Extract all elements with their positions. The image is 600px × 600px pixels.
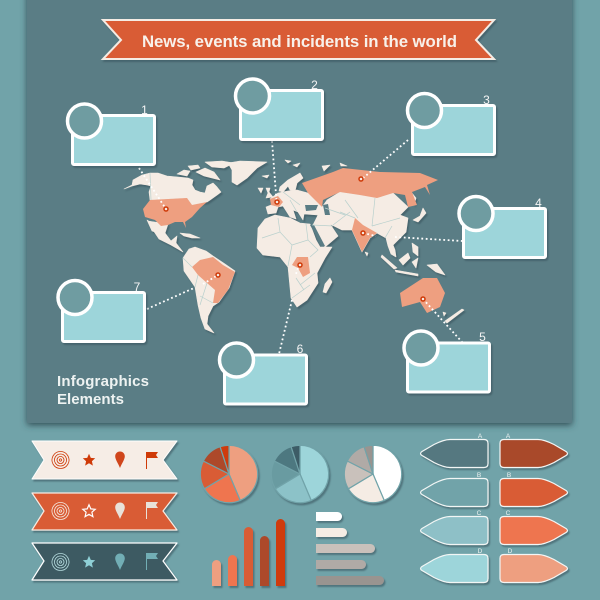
callout 4 — [459, 196, 546, 258]
caption: Infographics Elements: Elements — [57, 391, 124, 408]
pie chart: orange — [200, 445, 258, 503]
arrow letters: A — [506, 433, 511, 440]
arrow letters: C — [506, 510, 511, 517]
callout 1: 1 — [141, 103, 148, 117]
arrow labels: left set — [420, 440, 488, 582]
callout 7: 7 — [134, 280, 141, 294]
arrow letters: D — [508, 548, 513, 555]
arrow letters — [477, 433, 513, 555]
country borders — [150, 173, 400, 305]
callout 3: 3 — [483, 93, 490, 107]
arrow letters: A — [478, 433, 483, 440]
callout 1 — [68, 103, 154, 164]
callout 6: 6 — [297, 342, 304, 356]
arrow letters: B — [507, 472, 511, 479]
callout 5: 5 — [479, 330, 486, 344]
callout 7 — [58, 280, 144, 342]
location pins — [164, 177, 425, 301]
land masses — [124, 160, 464, 333]
arrow labels: right set — [500, 440, 568, 582]
title banner — [103, 20, 494, 59]
callout 5 — [404, 330, 490, 392]
pie chart: neutral — [344, 445, 402, 503]
ribbon: orange icons — [32, 493, 177, 530]
title banner: News, events and incidents in the world — [142, 32, 457, 51]
callout 2 — [236, 78, 322, 140]
callout 2: 2 — [311, 78, 318, 92]
callout 6 — [220, 342, 306, 404]
highlighted countries — [143, 168, 445, 313]
ribbon: dark icons — [32, 543, 177, 580]
arrow letters: B — [477, 472, 481, 479]
bar chart: horizontal — [316, 512, 384, 585]
world map — [124, 160, 464, 333]
arrow letters: D — [478, 548, 483, 555]
callout 4: 4 — [535, 196, 542, 210]
bar chart: vertical — [212, 519, 285, 586]
callout 3 — [408, 93, 494, 154]
caption: Infographics Elements: Infographics — [57, 373, 149, 390]
connector lines — [139, 140, 462, 354]
pie chart: teal — [271, 445, 329, 503]
inland seas — [197, 185, 330, 246]
ribbon: cream icons — [32, 441, 177, 479]
panel: world map panel — [27, 0, 572, 423]
caption: Infographics Elements — [57, 373, 149, 408]
arrow letters: C — [477, 510, 482, 517]
